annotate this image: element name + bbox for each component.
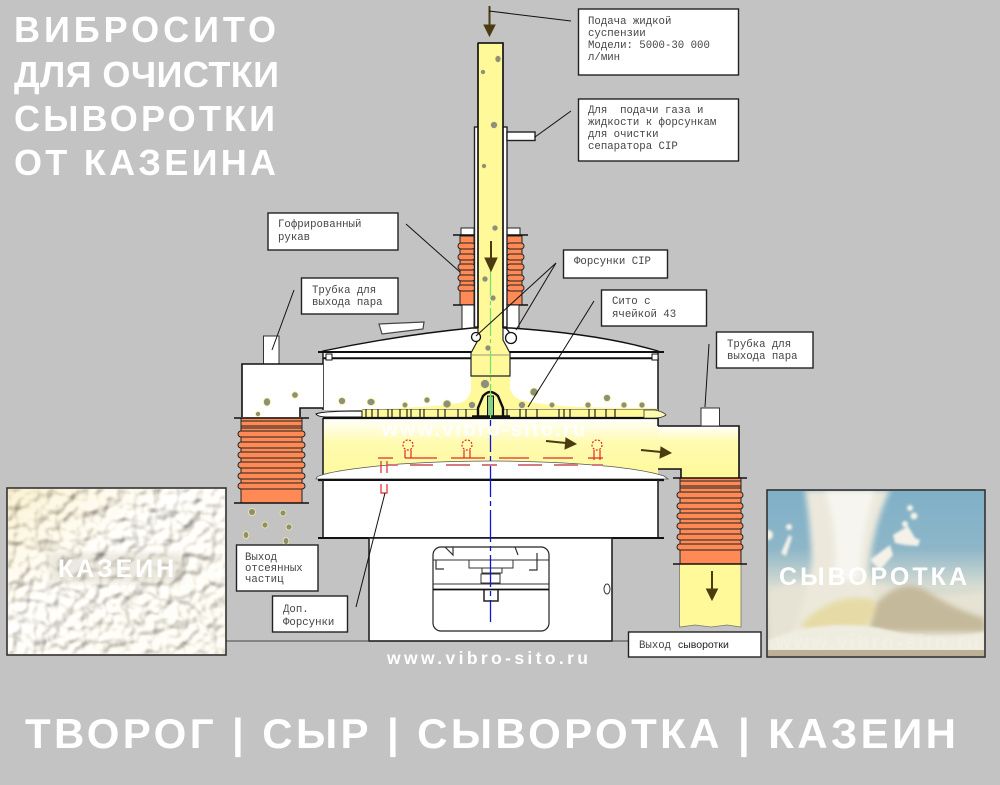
panel: casein photo: www.vibro-sito.ru bbox=[19, 629, 223, 651]
separator machine diagram bbox=[226, 6, 747, 641]
title bbox=[14, 9, 279, 183]
right outlet duct bbox=[658, 408, 739, 478]
callout: whey outlet: сыворотки bbox=[678, 639, 729, 651]
panel: whey photo: www.vibro-sito.ru bbox=[775, 632, 979, 654]
lower separator section with liquid bbox=[323, 418, 658, 480]
callout: whey outlet bbox=[628, 632, 761, 657]
callout: extra nozzles: Доп. bbox=[283, 604, 309, 616]
callout: screened particles outlet: отсеянных bbox=[245, 563, 303, 575]
flow arrow: whey outlet bbox=[706, 571, 718, 600]
panel: whey photo: СЫВОРОТКА bbox=[779, 563, 967, 591]
screen with 43 micron mesh bbox=[316, 409, 666, 418]
left steam duct bbox=[242, 336, 323, 417]
callout: feed: Модели: 5000-30 000 bbox=[588, 40, 710, 52]
base with drive bbox=[226, 538, 628, 641]
bottom product strip: ТВОРОГ | СЫР | СЫВОРОТКА | КАЗЕИН bbox=[25, 710, 956, 758]
callout: screened particles outlet: Выход bbox=[245, 552, 277, 564]
panel: casein photo: КАЗЕИН bbox=[58, 555, 174, 583]
callout: CIP gas and liquid: для очистки bbox=[588, 129, 659, 141]
title: ВИБРОСИТО bbox=[14, 9, 276, 50]
feed pipe bellows bbox=[453, 228, 528, 330]
flow arrow: duct bbox=[641, 447, 671, 458]
flow arrow: pipe bbox=[485, 241, 497, 271]
centre axis lines bbox=[490, 270, 492, 622]
callout: screened particles outlet bbox=[236, 545, 318, 591]
callout: screen bbox=[602, 290, 706, 326]
callout: feed: Подача жидкой bbox=[588, 16, 671, 28]
callout: feed bbox=[578, 9, 738, 75]
callout: screened particles outlet: частиц bbox=[245, 574, 284, 586]
product flow in upper section bbox=[363, 376, 657, 410]
watermark on diagram: www.vibro-sito.ru bbox=[381, 419, 585, 441]
callout: screen: ячейкой 43 bbox=[612, 309, 676, 321]
flow arrow: lower section bbox=[546, 438, 576, 449]
spray nozzles in red bbox=[378, 440, 603, 493]
callout: right steam tube bbox=[716, 332, 813, 368]
right bellows and outlet bbox=[673, 478, 747, 627]
callout: extra nozzles bbox=[272, 596, 348, 632]
panel: whey photo bbox=[763, 490, 985, 657]
left bellows bbox=[234, 418, 309, 503]
leader lines bbox=[272, 11, 709, 607]
lower separator body bbox=[318, 480, 664, 538]
callout: corrugated sleeve: Гофрированный bbox=[278, 218, 361, 231]
upper separator body bbox=[318, 322, 664, 426]
website url: www.vibro-sito.ru bbox=[386, 648, 588, 668]
suspended particles bbox=[243, 56, 645, 544]
callout: whey outlet: Выход bbox=[639, 640, 671, 652]
callout: feed: суспензии bbox=[588, 28, 646, 40]
title: СЫВОРОТКИ bbox=[14, 98, 275, 139]
callout: screen: Сито с bbox=[612, 296, 650, 308]
callout: feed: л/мин bbox=[588, 52, 620, 64]
callout: right steam tube: выхода пара bbox=[727, 351, 798, 363]
callout: CIP nozzles: Форсунки CIP bbox=[574, 256, 651, 268]
callout: CIP gas and liquid bbox=[578, 99, 738, 161]
title: ОТ КАЗЕИНА bbox=[14, 142, 276, 183]
title: ДЛЯ ОЧИСТКИ bbox=[14, 54, 279, 95]
CIP nozzles on lid bbox=[472, 327, 516, 344]
panel: casein photo bbox=[7, 488, 226, 655]
callout: CIP gas and liquid: Для подачи газа и bbox=[588, 105, 703, 117]
lower dish bbox=[316, 461, 668, 480]
callout: corrugated sleeve: рукав bbox=[278, 232, 310, 244]
callout: right steam tube: Трубка для bbox=[727, 338, 791, 351]
callout: extra nozzles: Форсунки bbox=[283, 617, 334, 629]
callout: corrugated sleeve bbox=[268, 213, 398, 250]
callout: CIP nozzles bbox=[564, 250, 668, 278]
flow arrow: feed bbox=[484, 6, 495, 36]
centre hub bbox=[472, 392, 510, 418]
callout: left steam tube: Трубка для bbox=[312, 284, 376, 297]
callout: left steam tube bbox=[302, 278, 398, 314]
callout: CIP gas and liquid: жидкости к форсункам bbox=[588, 116, 716, 129]
feed pipe bbox=[471, 43, 535, 376]
callout: CIP gas and liquid: сепаратора CIP bbox=[588, 141, 678, 153]
callout: left steam tube: выхода пара bbox=[312, 297, 383, 309]
